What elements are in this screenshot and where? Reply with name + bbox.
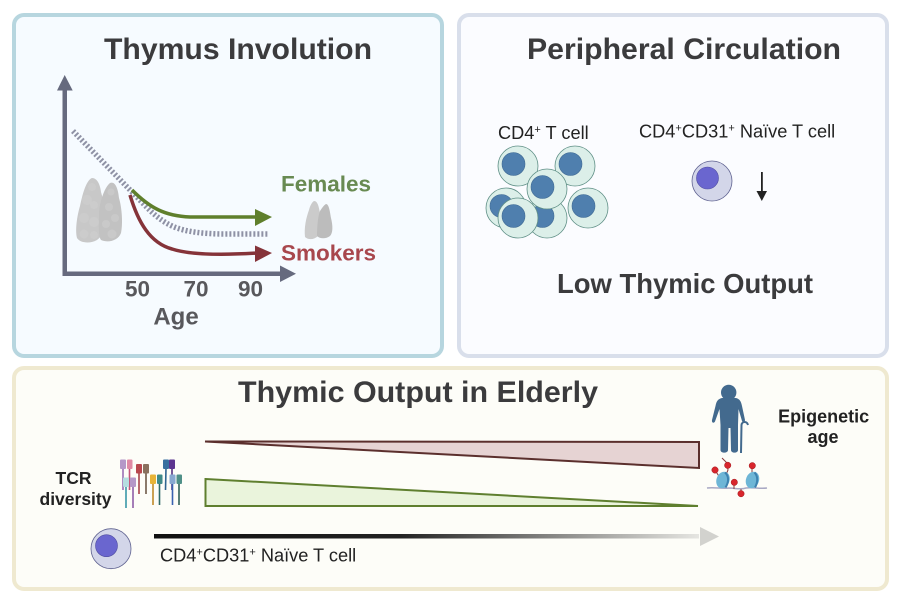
icon: T cell cluster: [486, 146, 608, 238]
label: CD4 T cell: +: [534, 124, 541, 136]
label: TCR diversity: TCR: [56, 468, 92, 488]
axis labels: 90: [238, 276, 263, 302]
panel: thymus involution: [14, 15, 442, 356]
icon: large thymus: [76, 178, 122, 242]
smokers curve: [130, 195, 272, 262]
label: TCR diversity: diversity: [40, 489, 112, 509]
arrow: decrease: [756, 172, 767, 201]
heading: thymic output in elderly: Thymic Output in Elderly: [238, 376, 598, 409]
icon: naive T cell: [91, 529, 131, 569]
axis labels: Age: [153, 304, 199, 330]
dotted average curve: [73, 131, 268, 234]
label: epigenetic age: Epigenetic: [778, 406, 869, 426]
axis labels: 50: [125, 276, 150, 302]
icon: small thymus: [305, 201, 332, 239]
label: CD4 CD31 naive T cell: +: [196, 546, 203, 558]
females curve: [132, 190, 272, 226]
wedge: TCR diversity decrease: [206, 479, 698, 506]
icon: TCR receptors: [120, 460, 182, 508]
label: CD4 CD31 naive T cell: CD31: [203, 546, 249, 566]
arrow: gradient: [154, 527, 719, 546]
panel: thymic output in elderly: [14, 368, 887, 589]
label: CD4 CD31 naive T cell: Naïve T cell: [735, 122, 835, 142]
heading: thymus involution: Thymus Involution: [104, 33, 372, 66]
icon: elderly person: [712, 385, 748, 453]
icon: methylated nucleosomes: [707, 458, 767, 497]
label: epigenetic age: age: [807, 427, 839, 447]
icon: naive T cell: [692, 161, 732, 201]
label: CD4 CD31 naive T cell: Naïve T cell: [256, 546, 356, 566]
panel: peripheral circulation: [459, 15, 887, 356]
label: CD4 CD31 naive T cell: CD4: [639, 122, 675, 142]
label: CD4 T cell: CD4: [498, 123, 534, 143]
label: CD4 CD31 naive T cell: CD4: [160, 546, 196, 566]
label: CD4 CD31 naive T cell: +: [249, 546, 256, 558]
heading: low thymic output: Low Thymic Output: [557, 268, 813, 299]
heading: peripheral circulation: Peripheral Circulation: [527, 33, 841, 66]
wedge: epigenetic age increase: [205, 442, 699, 468]
label: females: Females: [281, 172, 371, 196]
label: smokers: Smokers: [281, 240, 376, 266]
label: CD4 T cell: T cell: [541, 123, 589, 143]
label: CD4 CD31 naive T cell: CD31: [682, 122, 728, 142]
chart axes: [57, 75, 296, 282]
label: CD4 CD31 naive T cell: +: [728, 122, 735, 134]
label: CD4 CD31 naive T cell: +: [675, 122, 682, 134]
axis labels: [125, 276, 263, 330]
axis labels: 70: [183, 276, 209, 302]
